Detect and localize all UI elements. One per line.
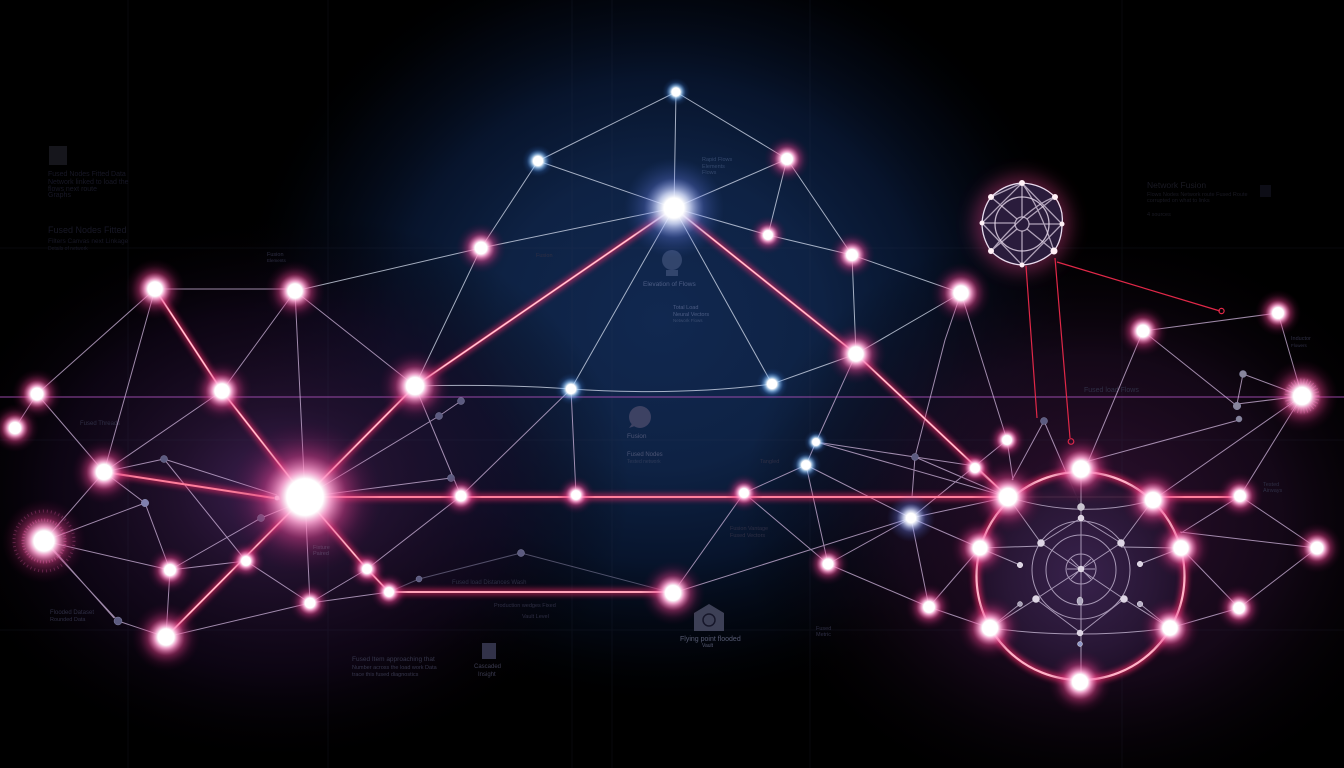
edges: left network [15, 289, 576, 637]
caption: lower center icon [627, 406, 663, 465]
caption: small notes: Production wedges Fixed [494, 603, 556, 609]
node: halo right [1266, 360, 1338, 432]
caption: top center [702, 157, 733, 176]
caption: left heading: Fused Nodes Fitted [48, 225, 127, 235]
node cluster: ring [951, 435, 1211, 714]
caption: top center: Elements [702, 164, 725, 170]
caption: small notes: Fusion [267, 252, 284, 258]
thin network edges [15, 92, 1317, 637]
caption: lower center icon: Tested network [627, 459, 661, 465]
caption: top right: Flows Nodes Network route Fused Route [1147, 192, 1248, 198]
caption: small notes: Inductor [1291, 336, 1311, 342]
glowing nodes: pink [0, 136, 1342, 714]
caption: top left: Graphs [48, 192, 71, 199]
caption: small notes: Fusion [536, 253, 553, 259]
caption: small notes: Fused [816, 626, 831, 632]
edges: right of center network [673, 293, 1081, 628]
caption: center icon and label [643, 250, 709, 323]
caption: small notes: Tested [1263, 482, 1279, 488]
caption: top center: Rapid Flows [702, 157, 733, 163]
caption: small notes: Tangled [760, 459, 779, 465]
ring inner nodes [1017, 504, 1143, 646]
caption: top left: flows next route [48, 186, 97, 193]
caption: small notes: Fused Threads [80, 421, 120, 427]
caption: bottom left: Fused Item approaching that [352, 656, 435, 663]
glowing nodes: blue and white [522, 78, 935, 542]
caption: small notes: Fused Vectors [730, 533, 765, 539]
thin red connector lines [1026, 258, 1224, 444]
caption: bottom icon: Cascaded [474, 664, 501, 670]
caption: hub label: Paired [313, 551, 329, 557]
node cluster: center right [641, 136, 1026, 630]
caption: small notes: Fused load Distances Wash [452, 580, 526, 586]
gray secondary nodes [114, 370, 1246, 625]
caption: top right: corrupted on what to links [1147, 198, 1210, 204]
caption: bottom icon [474, 643, 501, 678]
caption: top left: Fused Nodes Fitted Data [48, 171, 126, 178]
caption: top right [1147, 180, 1271, 218]
caption: bottom left [352, 656, 438, 678]
caption: small notes: Fused load Flows [1084, 387, 1139, 394]
caption: left heading [48, 225, 129, 252]
faint caption texts [48, 146, 1311, 678]
caption: lower center icon: Fused Nodes [627, 452, 663, 458]
caption: top left [48, 146, 129, 199]
caption: top left: Network linked to load the [48, 179, 129, 186]
caption: left heading: Details of network [48, 246, 88, 252]
caption: camera icon: Flying point flooded [680, 636, 741, 643]
caption: center icon and label: Neural Vectors [673, 312, 709, 318]
caption: small notes: Fusion Vantage [730, 526, 768, 532]
edges: top pyramid [295, 92, 961, 392]
caption: bottom left: Number across the load work Data [352, 665, 438, 671]
node: main left hub [229, 421, 381, 573]
caption: top right: Network Fusion [1147, 180, 1206, 190]
node cluster: far right [1118, 290, 1342, 631]
caption: center icon and label: Total Load [673, 305, 698, 311]
caption: small notes [50, 252, 1311, 638]
caption: small notes: Flooded Dataset [50, 610, 94, 616]
red glowing edges [104, 208, 1240, 637]
caption: bottom left: trace this fused diagnostics [352, 672, 419, 678]
caption: small notes: Rounded Data [50, 617, 86, 623]
caption: center icon and label: Network Flows [673, 318, 703, 323]
caption: small notes: Metric [816, 632, 831, 638]
horizontal purple axis line [0, 396, 1344, 398]
caption: camera icon: Vault [702, 643, 714, 649]
caption: camera icon [680, 604, 741, 649]
edges: far right network [1085, 313, 1317, 628]
panel: large ring hub [976, 469, 1184, 682]
caption: bottom icon: Insight [478, 672, 496, 678]
caption: small notes: Flowers [1291, 343, 1308, 348]
node: halo left [2, 499, 86, 583]
ring inner structure [980, 469, 1181, 682]
node: top hub [624, 158, 724, 258]
node cluster: left [0, 223, 595, 671]
panel: polyhedron emblem [974, 176, 1070, 272]
caption: lower center icon: Fusion [627, 433, 647, 440]
caption: left heading: Filters Canvas next Linkage [48, 238, 129, 245]
caption: hub label: Fixture [313, 545, 330, 551]
caption: small notes: Airways [1263, 488, 1283, 494]
caption: center icon and label: Elevation of Flows [643, 281, 696, 288]
caption: hub label [313, 545, 330, 557]
caption: top right: 4 sources [1147, 212, 1171, 218]
caption: top center: Flows [702, 170, 717, 176]
caption: small notes: Elements [267, 258, 287, 263]
caption: small notes: Vault Level [522, 614, 549, 620]
